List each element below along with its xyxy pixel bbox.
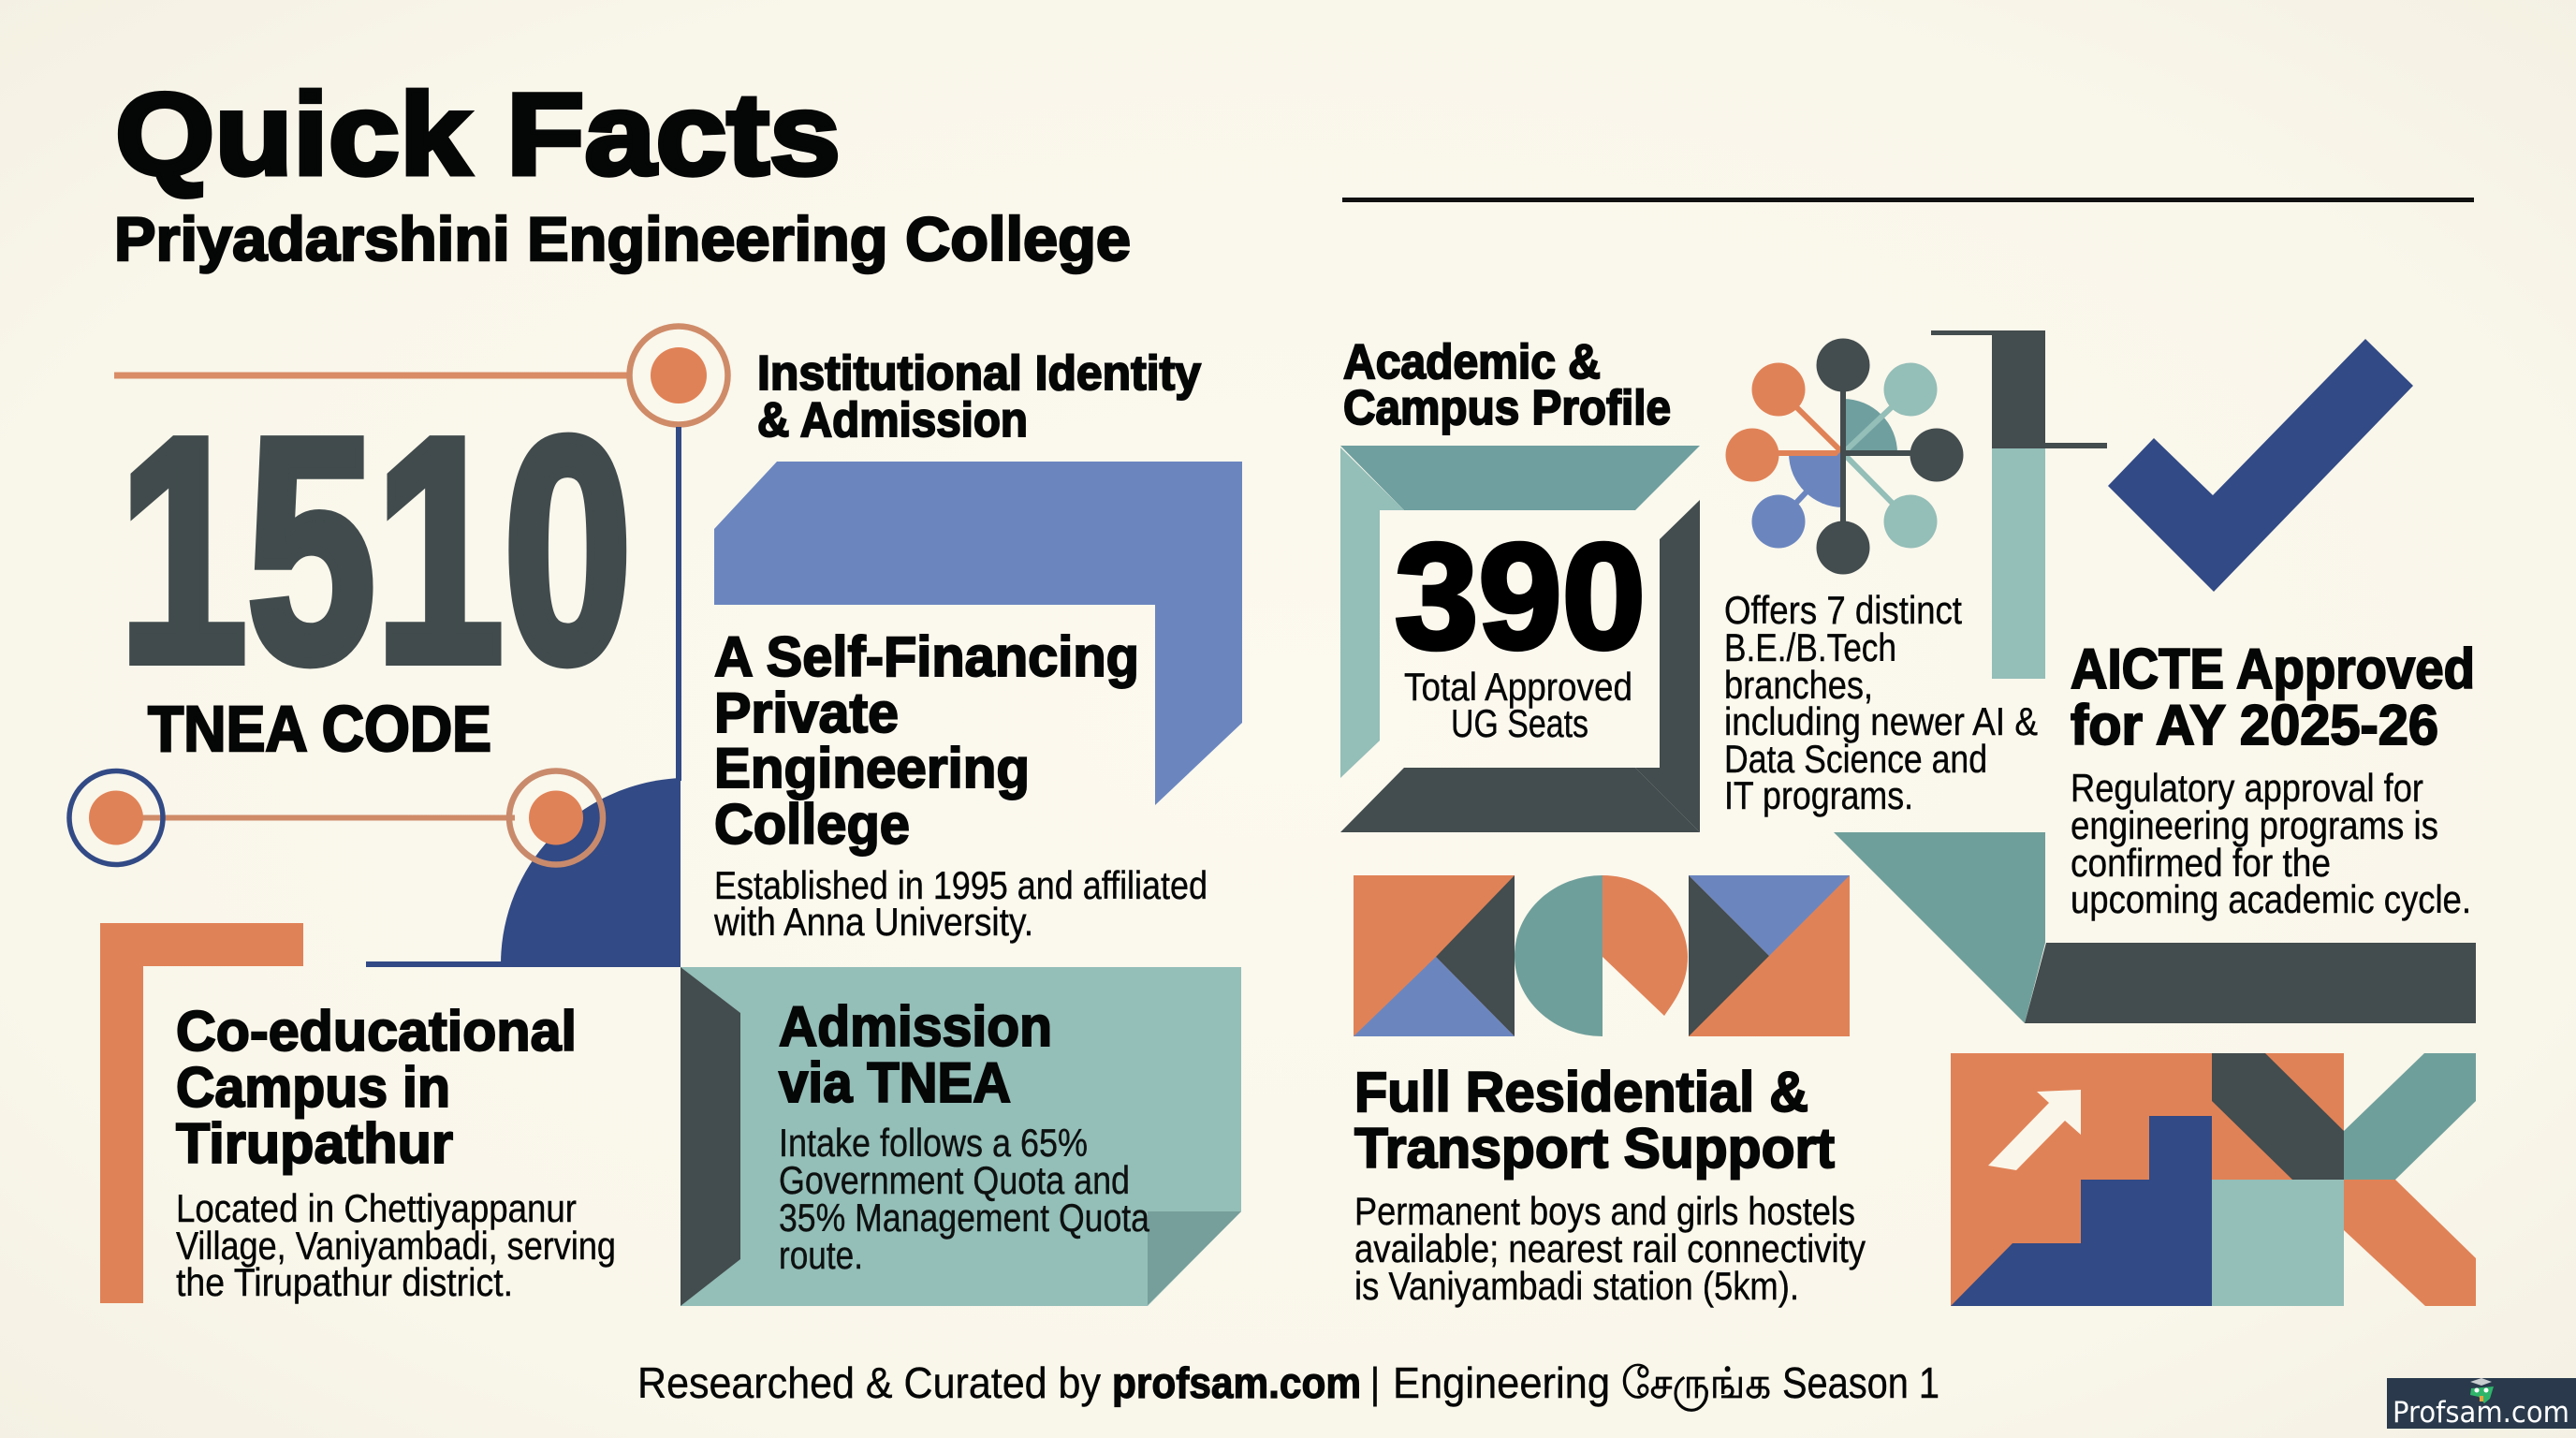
navy quarter circle	[501, 778, 681, 964]
decorative column	[1931, 330, 2107, 679]
branches description: Offers 7 distinct	[1724, 588, 1962, 632]
description: Village, Vaniyambadi, serving	[176, 1224, 616, 1268]
panel: co-educational campus	[100, 923, 616, 1304]
description	[779, 1121, 1150, 1277]
branches description	[1724, 588, 2038, 817]
orange L bracket	[100, 923, 303, 1303]
lower orange connector line	[140, 814, 515, 820]
footer credit: Season 1	[1782, 1358, 1939, 1407]
heading: Full Residential &	[1354, 1061, 1808, 1123]
description: Government Quota and	[779, 1158, 1130, 1202]
description: available; nearest rail connectivity	[1354, 1226, 1866, 1270]
branches description: branches,	[1724, 663, 1873, 707]
self financing description	[713, 863, 1208, 944]
panel: residential and transport	[1354, 875, 2476, 1308]
section heading	[757, 346, 1201, 448]
description: Intake follows a 65%	[779, 1121, 1088, 1165]
heading: AICTE Approved	[2071, 638, 2475, 700]
top orange connector line	[114, 373, 629, 378]
description	[1354, 1189, 1866, 1308]
big number 390: 390	[1395, 512, 1646, 680]
section heading: Academic &	[1343, 335, 1601, 389]
teal triangle and dark bar	[1834, 832, 2476, 1023]
seats frame	[1340, 446, 1700, 832]
self financing heading: Private	[714, 682, 899, 744]
heading: Campus in	[176, 1056, 450, 1119]
self financing heading: College	[714, 793, 910, 856]
blue frame shape	[714, 462, 1242, 805]
description: Located in Chettiyappanur	[176, 1186, 577, 1230]
footer credit: Engineering	[1393, 1358, 1610, 1407]
branches description: IT programs.	[1724, 773, 1913, 817]
section heading: & Admission	[757, 393, 1028, 448]
footer credit: profsam.com	[1112, 1358, 1361, 1407]
header rule	[1342, 198, 2474, 202]
logo badge	[2387, 1378, 2576, 1430]
heading: via TNEA	[779, 1051, 1011, 1114]
description: Regulatory approval for	[2071, 766, 2423, 810]
description: route.	[779, 1233, 863, 1277]
branches description: Data Science and	[1724, 737, 1987, 781]
heading: for AY 2025-26	[2071, 694, 2438, 756]
heading: Tirupathur	[176, 1112, 453, 1175]
icon: mascot	[2470, 1378, 2494, 1403]
navy base line	[366, 961, 681, 967]
description: the Tirupathur district.	[176, 1260, 513, 1304]
description	[176, 1186, 616, 1304]
branches description: B.E./B.Tech	[1724, 625, 1896, 669]
self financing description: Established in 1995 and affiliated	[714, 863, 1208, 907]
footer credit: Researched & Curated by	[637, 1358, 1101, 1407]
node: lower-left ring	[69, 771, 163, 865]
heading: Admission	[779, 995, 1052, 1058]
heading	[779, 995, 1052, 1114]
self financing heading: Engineering	[714, 737, 1030, 800]
self financing heading: A Self-Financing	[714, 625, 1139, 688]
description: engineering programs is	[2071, 803, 2438, 847]
panel: academic and campus profile	[1340, 335, 2038, 832]
panel: TNEA code connectors	[69, 326, 728, 967]
heading: Transport Support	[1354, 1117, 1835, 1180]
heading	[2071, 638, 2475, 756]
geometric pattern with stairs and arrow	[1951, 1053, 2476, 1306]
description	[2071, 766, 2471, 921]
footer credit: சேருங்க	[1621, 1358, 1771, 1411]
panel: institutional identity	[713, 346, 1242, 944]
seats caption: UG Seats	[1451, 701, 1588, 745]
dark left bevel	[681, 967, 740, 1306]
geometric pattern	[1354, 875, 1850, 1036]
self financing description: with Anna University.	[713, 900, 1033, 944]
description: is Vaniyambadi station (5km).	[1354, 1264, 1799, 1308]
seats caption	[1404, 665, 1632, 745]
panel: admission via TNEA	[681, 967, 1241, 1306]
title: Quick Facts	[115, 70, 841, 199]
folded corner	[1148, 1211, 1241, 1305]
TNEA CODE label: TNEA CODE	[148, 693, 491, 765]
footer credit: |	[1369, 1358, 1381, 1407]
icon: branch network	[1726, 339, 1964, 575]
heading: Co-educational	[176, 1000, 577, 1063]
logo text: Profsam.com	[2393, 1396, 2569, 1430]
subtitle: Priyadarshini Engineering College	[114, 204, 1131, 273]
section heading: Campus Profile	[1343, 381, 1671, 435]
heading	[1354, 1061, 1835, 1180]
description: Permanent boys and girls hostels	[1354, 1189, 1855, 1233]
section heading	[1343, 335, 1671, 435]
branches description: including newer AI &	[1724, 699, 2038, 743]
navy vertical line	[676, 427, 681, 781]
footer credit	[637, 1358, 1939, 1411]
node: lower-right ring	[509, 771, 603, 865]
icon: check mark	[2108, 339, 2413, 592]
panel: AICTE approval	[1834, 330, 2476, 1023]
seats caption: Total Approved	[1404, 665, 1632, 709]
section heading: Institutional Identity	[757, 346, 1201, 401]
node: top ring	[629, 326, 728, 425]
description: 35% Management Quota	[779, 1196, 1150, 1240]
description: upcoming academic cycle.	[2071, 877, 2471, 921]
big number 1510: 1510	[119, 373, 632, 728]
description: confirmed for the	[2071, 841, 2331, 885]
heading	[176, 1000, 577, 1175]
self financing heading	[714, 625, 1139, 856]
teal panel	[681, 967, 1241, 1306]
